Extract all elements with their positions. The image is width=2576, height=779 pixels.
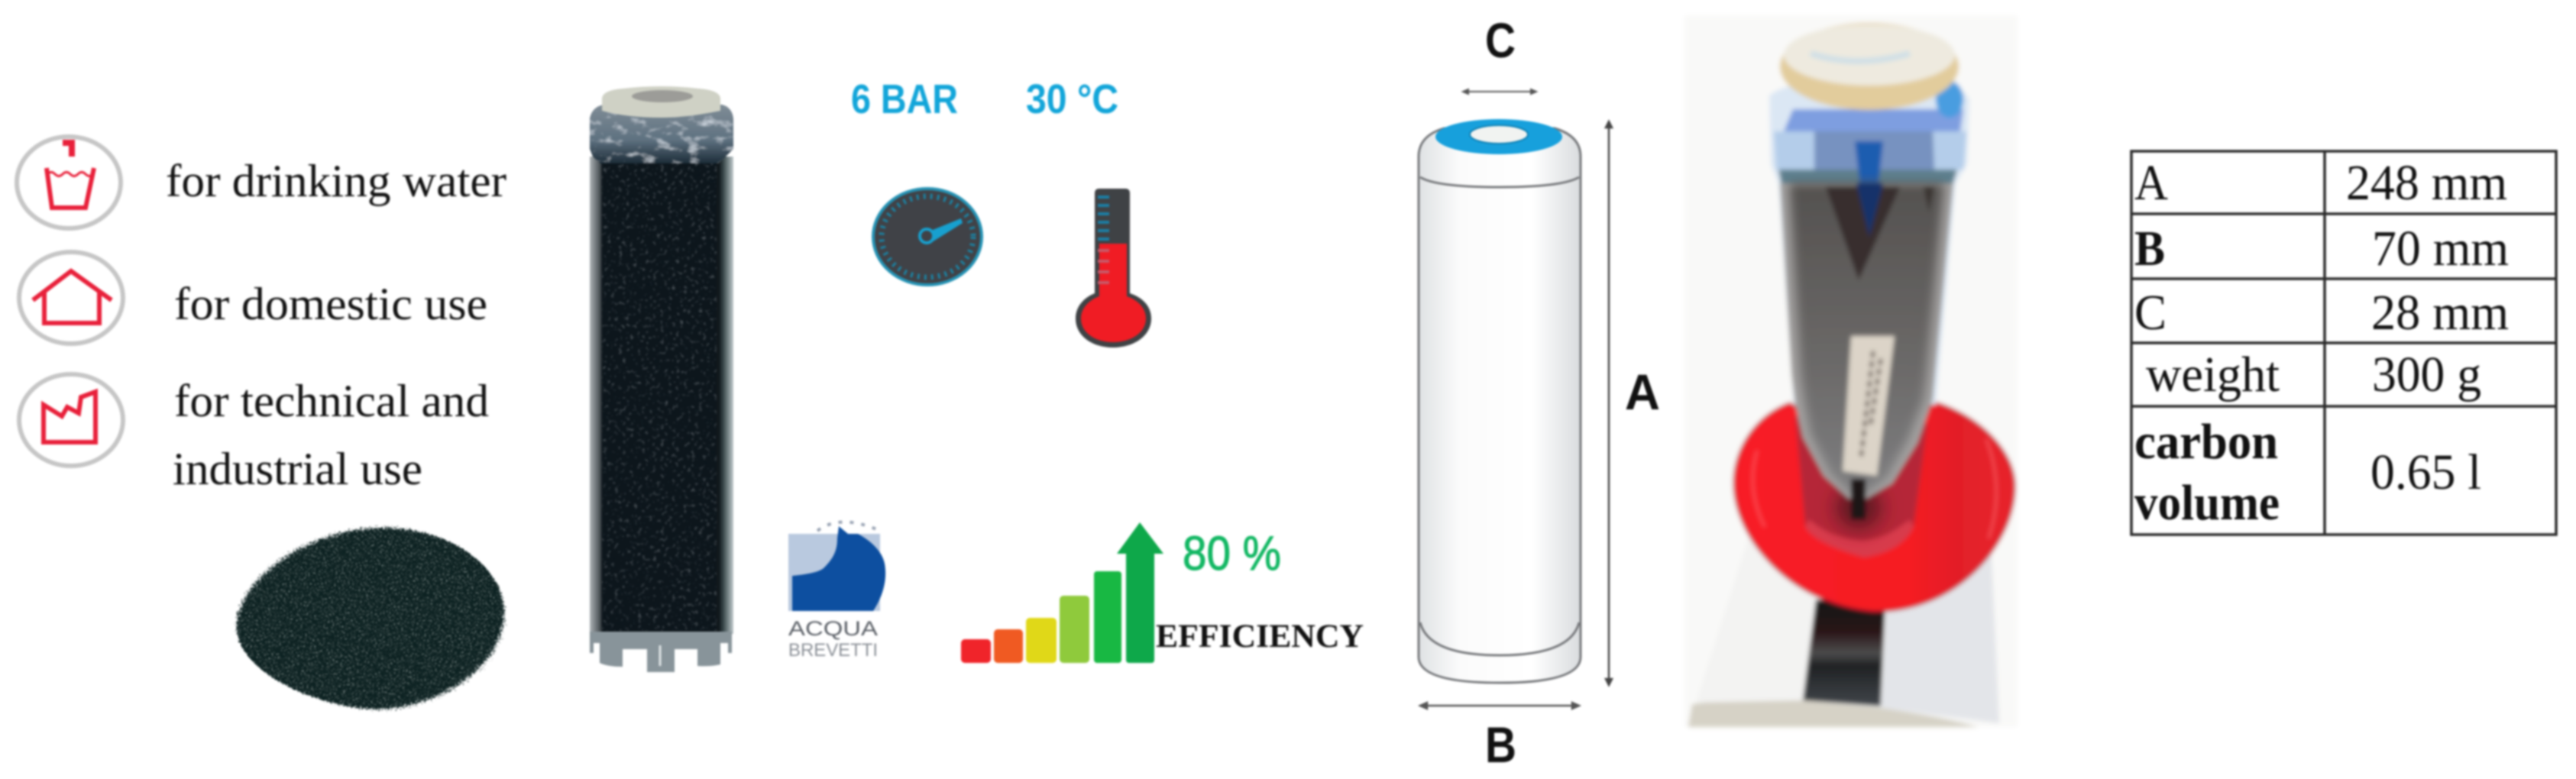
icon: drinking water [17,137,121,228]
row: A [2134,155,2507,211]
row: C: C [2134,285,2167,341]
row: C: 28 mm [2371,285,2509,341]
label: efficiency: EFFICIENCY [1156,619,1364,655]
row: A: A [2134,155,2168,211]
label: B: B [1485,716,1516,773]
image: photo of cartridge on red dish [1684,15,2018,727]
row: B: 70 mm [2372,221,2509,276]
row: C [2134,285,2509,341]
label: technical and industrial use: for technical and [174,376,489,426]
table: specifications [2131,151,2556,535]
label: pressure 6 BAR: 6 BAR [851,76,958,122]
icon: domestic use [19,252,123,344]
row: A: 248 mm [2346,155,2507,211]
row: carbon volume: 0.65 l [2371,444,2481,500]
arrow: dimension C [1463,89,1536,94]
label: 80 %: 80 % [1183,527,1281,580]
cartridge outline [1419,119,1581,683]
logo: Acqua Brevetti: ACQUA [788,617,878,640]
label: technical and industrial use [173,376,489,494]
icon: technical and industrial use [19,374,123,466]
label: domestic use: for domestic use [174,279,487,329]
logo: Acqua Brevetti: BREVETTI [788,640,878,661]
chart: efficiency bars and arrow [961,522,1163,663]
logo: Acqua Brevetti [788,522,885,661]
diagram: cartridge dimensions [1419,13,1660,773]
row: B [2134,221,2509,276]
image: carbon filter cartridge [590,86,733,672]
row: weight: weight [2146,347,2280,402]
label: drinking water: for drinking water [166,156,506,206]
label: temperature 30 °C: 30 °C [1026,76,1118,122]
row: carbon volume [2134,414,2481,531]
icon: pressure gauge [873,189,982,285]
row: weight [2146,347,2481,402]
label: technical and industrial use: industrial use [173,444,422,494]
label: C: C [1485,13,1516,68]
label: A: A [1625,364,1660,420]
row: B: B [2134,221,2165,276]
row: weight: 300 g [2372,347,2481,402]
table grid [2131,151,2556,535]
arrow: dimension B [1420,703,1579,709]
row: carbon volume: volume [2134,475,2280,531]
row: carbon volume: carbon [2134,414,2278,470]
panel: uses list [17,137,506,494]
image: activated carbon pile [236,528,504,710]
arrow: dimension A [1606,121,1612,685]
icon: thermometer [1076,189,1151,347]
